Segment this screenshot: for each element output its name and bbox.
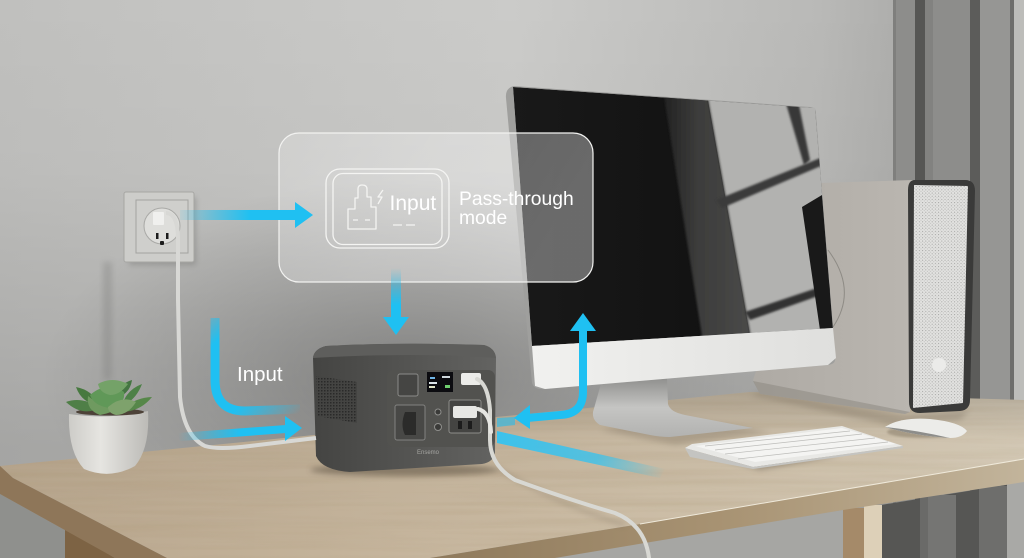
wall shadow of power cord: [103, 262, 112, 380]
side vent: [316, 376, 357, 423]
cable: wall to station: [166, 213, 316, 448]
station body: [313, 344, 496, 472]
monitor body: [506, 86, 835, 389]
arrow: station to monitor and back: [497, 313, 596, 429]
top plug: [461, 373, 481, 385]
computer tower: [753, 180, 975, 414]
desk: [0, 390, 1024, 558]
pot: [69, 411, 148, 474]
large socket: [395, 405, 425, 440]
brand mark: Ensemo: [417, 450, 440, 456]
monitor: [506, 86, 850, 437]
glass panel: pass-through mode: [279, 133, 593, 282]
icon dashes: [393, 224, 415, 226]
text: pass-through mode: mode: [459, 208, 507, 229]
arrow: outlet to panel: [180, 202, 313, 228]
arrow: panel to station: [383, 268, 409, 335]
monitor stand: [593, 378, 753, 437]
station top: [313, 344, 496, 358]
top-left port: [398, 374, 418, 396]
usb socket with plug: [449, 400, 481, 433]
arrow: curved input: [215, 318, 300, 411]
icon frame: [326, 169, 449, 248]
wall outlet: [124, 192, 196, 265]
text: pass-through mode: Pass-through: [459, 189, 574, 210]
arrow: input to station: [178, 416, 302, 441]
under-desk wall and legs: [0, 482, 1024, 558]
display: [427, 372, 453, 392]
arrow: output beam on desk: [497, 431, 665, 478]
text: input: Input: [390, 192, 436, 215]
label: input: Input: [237, 363, 283, 386]
icon: plug with bolt: [348, 185, 383, 229]
keyboard: [685, 426, 903, 470]
power station: [310, 344, 500, 476]
control panel: [387, 370, 495, 447]
monitor screen: [513, 87, 850, 346]
cable: station to desk: [477, 379, 649, 558]
round buttons: [434, 409, 442, 430]
succulent: [66, 380, 152, 416]
monitor chin: [532, 328, 836, 389]
plant: [66, 380, 152, 474]
mouse: [885, 419, 967, 438]
curtain: [893, 0, 1024, 558]
